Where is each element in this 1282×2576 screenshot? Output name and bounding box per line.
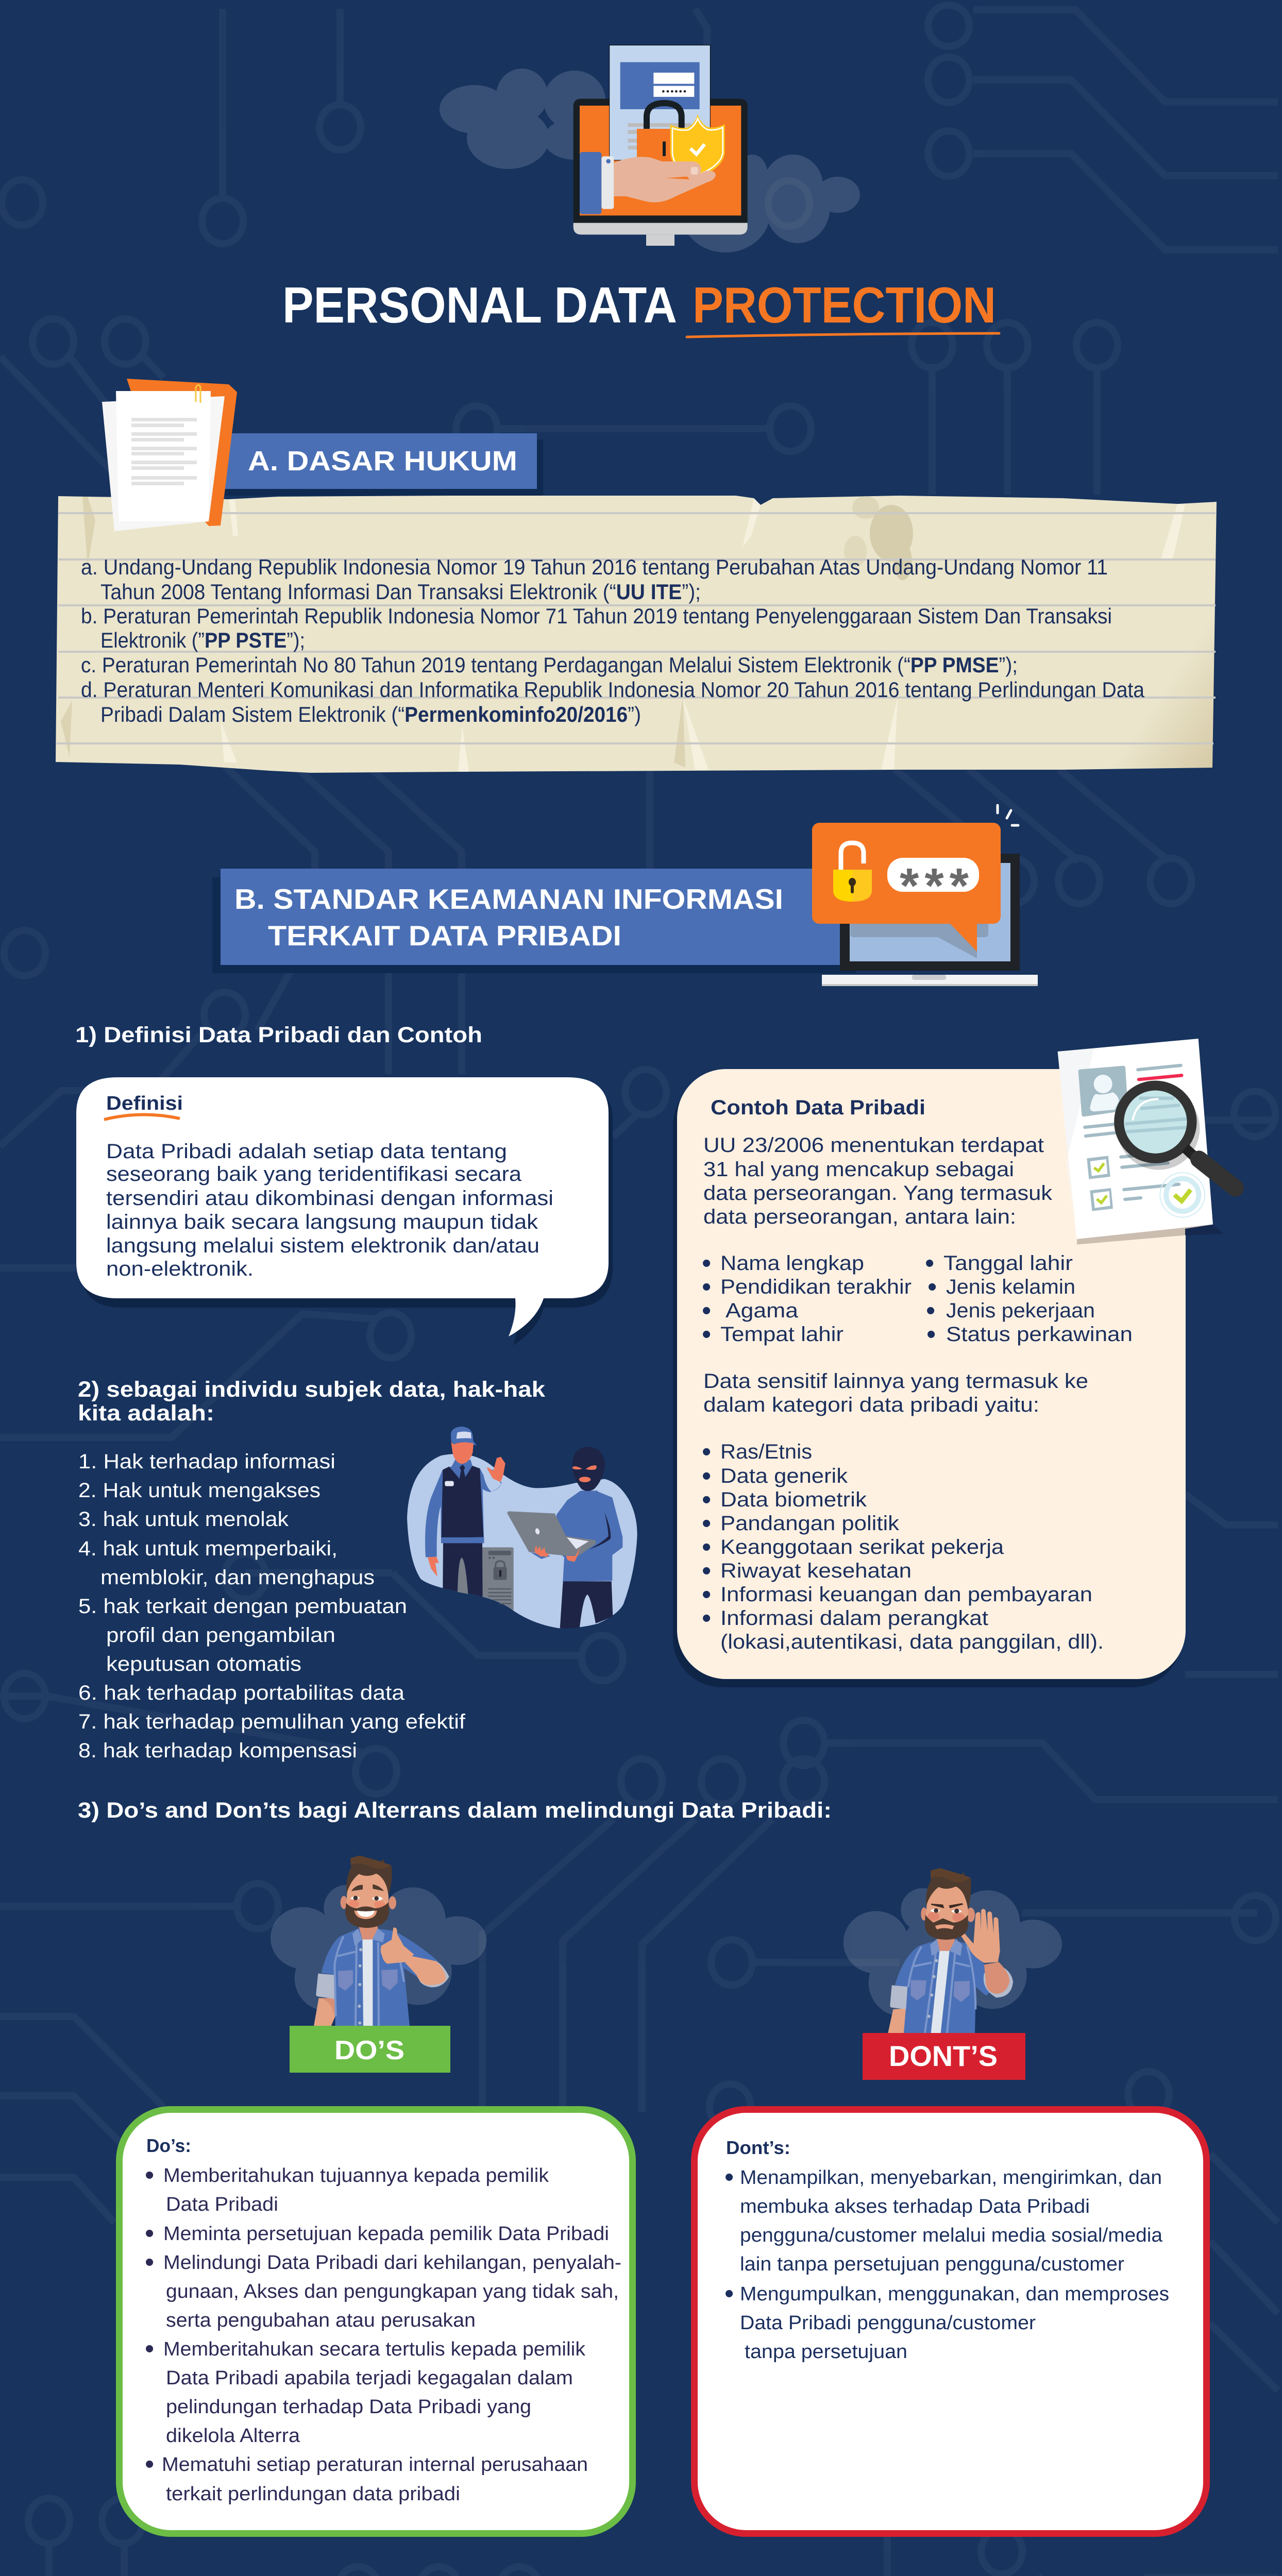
examples heading: Contoh Data Pribadi bbox=[711, 1096, 925, 1119]
icon: document with magnifier bbox=[1058, 1039, 1235, 1245]
list: hak-hak subjek data: 8. hak terhadap kompensasi bbox=[78, 1739, 357, 1762]
Don'ts items: Menampilkan, menyebarkan, mengirimkan, dan bbox=[740, 2167, 1162, 2189]
personal data list: • bbox=[702, 1319, 711, 1349]
intro text: data perseorangan, antara lain: bbox=[703, 1206, 1016, 1228]
illustration: security guard and hacker bbox=[407, 1427, 637, 1629]
illustration: man giving thumbs up bbox=[271, 1856, 486, 2026]
Do's items: Data Pribadi bbox=[166, 2194, 278, 2215]
label: DONT'S: DONT’S bbox=[889, 2040, 998, 2072]
legal basis list: Tahun 2008 Tentang Informasi Dan Transaksi Elektronik (“UU ITE”); bbox=[100, 580, 701, 604]
legal basis list: Elektronik (”PP PSTE”); bbox=[100, 628, 305, 652]
definition text: Data Pribadi adalah setiap data tentang bbox=[106, 1140, 507, 1163]
sensitive data intro: dalam kategori data pribadi yaitu: bbox=[703, 1394, 1039, 1416]
list: hak-hak subjek data: 5. hak terkait dengan pembuatan bbox=[78, 1595, 407, 1618]
Do's items: • bbox=[145, 2247, 154, 2277]
Do's items: • bbox=[145, 2218, 154, 2248]
Do's items: Memberitahukan secara tertulis kepada pemilik bbox=[163, 2338, 586, 2360]
personal data list: Tempat lahir bbox=[720, 1323, 844, 1346]
heading: 2) hak-hak subjek data: 2) sebagai individu subjek data, hak-hak bbox=[78, 1377, 545, 1402]
sensitive data list: Riwayat kesehatan bbox=[720, 1560, 912, 1582]
list: hak-hak subjek data: 1. Hak terhadap informasi bbox=[78, 1450, 335, 1473]
definition text: non-elektronik. bbox=[106, 1258, 254, 1280]
heading: 1) Definisi Data Pribadi dan Contoh: 1) Definisi Data Pribadi dan Contoh bbox=[75, 1023, 482, 1047]
sensitive data list: • bbox=[702, 1437, 711, 1467]
Do's items: serta pengubahan atau perusakan bbox=[166, 2310, 476, 2331]
personal data list: Jenis kelamin bbox=[946, 1276, 1075, 1298]
sensitive data list: Ras/Etnis bbox=[720, 1440, 812, 1463]
sensitive data list: Data generik bbox=[720, 1465, 848, 1487]
Don'ts items: pengguna/customer melalui media sosial/media bbox=[740, 2225, 1163, 2246]
label: DO'S: DO’S bbox=[334, 2036, 404, 2065]
Definisi label: Definisi bbox=[106, 1093, 183, 1114]
Do's items: Melindungi Data Pribadi dari kehilangan, penyalah- bbox=[163, 2252, 621, 2274]
personal data list: Jenis pekerjaan bbox=[946, 1299, 1095, 1322]
intro text: UU 23/2006 menentukan terdapat bbox=[703, 1134, 1044, 1157]
personal data list: Status perkawinan bbox=[946, 1323, 1133, 1346]
Do's items: • bbox=[145, 2334, 154, 2364]
panel: torn paper with legal basis bbox=[56, 496, 1217, 773]
legal basis list: b. Peraturan Pemerintah Republik Indonesia Nomor 71 Tahun 2019 tentang Penyelenggaraan Sistem Dan Transaksi bbox=[81, 604, 1112, 628]
sensitive data list: • bbox=[702, 1509, 711, 1538]
heading: B. Standar Keamanan Informasi: B. STANDAR KEAMANAN INFORMASI bbox=[234, 883, 783, 915]
Don'ts heading: Dont’s: bbox=[726, 2137, 790, 2158]
personal data list: Tanggal lahir bbox=[943, 1252, 1073, 1275]
list: hak-hak subjek data: keputusan otomatis bbox=[106, 1653, 301, 1675]
personal data list: • bbox=[702, 1296, 711, 1326]
panel: Do's list bbox=[120, 2109, 633, 2534]
personal data list: • bbox=[926, 1319, 936, 1349]
definition text: tersendiri atau dikombinasi dengan informasi bbox=[106, 1187, 553, 1210]
legal basis list: a. Undang-Undang Republik Indonesia Nomor 19 Tahun 2016 tentang Perubahan Atas Undang-Undang Nomor 11 bbox=[81, 555, 1108, 579]
illustration: man raising stop hand bbox=[844, 1868, 1062, 2033]
Do's items: terkait perlindungan data pribadi bbox=[166, 2483, 460, 2505]
icon: laptop with password bubble: *** bbox=[900, 858, 969, 913]
definition text: lainnya baik secara langsung maupun tidak bbox=[106, 1211, 538, 1233]
legal basis list bbox=[81, 555, 1145, 726]
list: hak-hak subjek data: profil dan pengambilan bbox=[106, 1624, 335, 1647]
heading: B. Standar Keamanan Informasi: TERKAIT DATA PRIBADI bbox=[268, 920, 621, 952]
personal data list: • bbox=[925, 1248, 934, 1278]
panel: Contoh Data Pribadi bbox=[673, 1069, 1186, 1687]
Don'ts items: • bbox=[724, 2279, 734, 2309]
Do's items: • bbox=[145, 2449, 154, 2479]
Do's items: pelindungan terhadap Data Pribadi yang bbox=[166, 2396, 531, 2418]
title: PERSONAL DATA bbox=[282, 277, 677, 333]
intro text bbox=[703, 1134, 1053, 1228]
list: hak-hak subjek data: 7. hak terhadap pemulihan yang efektif bbox=[78, 1710, 466, 1733]
personal data list: Pendidikan terakhir bbox=[720, 1276, 912, 1298]
intro text: 31 hal yang mencakup sebagai bbox=[703, 1158, 1014, 1181]
sensitive data list: (lokasi,autentikasi, data panggilan, dll). bbox=[720, 1631, 1104, 1653]
Do's heading: Do’s: bbox=[146, 2135, 191, 2156]
icon: monitor with login page, padlock, shield and hand bbox=[440, 45, 860, 252]
heading: 3) Do's and Don'ts: 3) Do’s and Don’ts bagi Alterrans dalam melindungi Data Pribadi: bbox=[78, 1798, 832, 1823]
personal data list: Nama lengkap bbox=[720, 1252, 864, 1275]
legal basis list: d. Peraturan Menteri Komunikasi dan Informatika Republik Indonesia Nomor 20 Tahun 2016 tentang Perlindungan Data bbox=[81, 677, 1145, 702]
title: PROTECTION bbox=[693, 277, 996, 333]
Do's items: dikelola Alterra bbox=[166, 2425, 300, 2447]
Do's items: Data Pribadi apabila terjadi kegagalan dalam bbox=[166, 2367, 573, 2389]
Do's items: Meminta persetujuan kepada pemilik Data Pribadi bbox=[163, 2223, 609, 2245]
sensitive data list: Data biometrik bbox=[720, 1488, 867, 1511]
sensitive data list: • bbox=[702, 1580, 711, 1609]
sensitive data list: Informasi dalam perangkat bbox=[720, 1607, 988, 1630]
Don'ts items: lain tanpa persetujuan pengguna/customer bbox=[740, 2253, 1124, 2275]
Do's items: Memberitahukan tujuannya kepada pemilik bbox=[163, 2165, 549, 2187]
heading: A. Dasar Hukum: A. DASAR HUKUM bbox=[248, 446, 517, 477]
sensitive data list: • bbox=[702, 1461, 711, 1491]
heading: 2) hak-hak subjek data: kita adalah: bbox=[78, 1401, 214, 1426]
sensitive data list: Pandangan politik bbox=[720, 1512, 900, 1535]
list: hak-hak subjek data: 3. hak untuk menolak bbox=[78, 1508, 289, 1531]
Don'ts items: • bbox=[724, 2162, 734, 2192]
sensitive data intro: Data sensitif lainnya yang termasuk ke bbox=[703, 1370, 1088, 1393]
definition text: seseorang baik yang teridentifikasi secara bbox=[106, 1163, 522, 1185]
sensitive data list: • bbox=[702, 1532, 711, 1562]
icon: laptop with password bubble bbox=[812, 805, 1038, 986]
heading: A. Dasar Hukum bbox=[222, 433, 543, 496]
list: hak-hak subjek data: 6. hak terhadap portabilitas data bbox=[78, 1682, 405, 1704]
personal data list: • bbox=[702, 1248, 711, 1278]
Don'ts items bbox=[724, 2162, 1169, 2363]
Do's items bbox=[145, 2160, 621, 2505]
list: hak-hak subjek data: 2. Hak untuk mengakses bbox=[78, 1479, 320, 1502]
Don'ts items: tanpa persetujuan bbox=[745, 2341, 907, 2363]
Do's items: gunaan, Akses dan pengungkapan yang tidak sah, bbox=[166, 2281, 619, 2302]
Don'ts items: Data Pribadi pengguna/customer bbox=[740, 2312, 1036, 2334]
list: hak-hak subjek data: 4. hak untuk memperbaiki, bbox=[78, 1537, 338, 1560]
personal data list: • bbox=[926, 1296, 935, 1326]
definition text bbox=[106, 1140, 553, 1280]
heading: B. Standar Keamanan Informasi bbox=[212, 869, 856, 973]
personal data list: • bbox=[702, 1272, 711, 1302]
panel: Definisi speech bubble bbox=[76, 1077, 613, 1345]
personal data list bbox=[702, 1248, 1133, 1349]
sensitive data list bbox=[702, 1437, 1104, 1653]
legal basis list: c. Peraturan Pemerintah No 80 Tahun 2019 tentang Perdagangan Melalui Sistem Elektronik (“PP PMSE”); bbox=[81, 653, 1018, 677]
panel: Don'ts list bbox=[695, 2109, 1207, 2534]
legal basis list: Pribadi Dalam Sistem Elektronik (“Permenkominfo20/2016”) bbox=[100, 702, 641, 726]
Don'ts items: membuka akses terhadap Data Pribadi bbox=[740, 2196, 1090, 2217]
definition text: langsung melalui sistem elektronik dan/atau bbox=[106, 1234, 539, 1257]
Do's items: Mematuhi setiap peraturan internal perusahaan bbox=[162, 2454, 588, 2476]
sensitive data list: • bbox=[702, 1485, 711, 1515]
sensitive data intro bbox=[703, 1370, 1088, 1416]
personal data list: • bbox=[927, 1272, 937, 1302]
sensitive data list: Informasi keuangan dan pembayaran bbox=[720, 1583, 1092, 1606]
sensitive data list: • bbox=[702, 1603, 711, 1633]
intro text: data perseorangan. Yang termasuk bbox=[703, 1182, 1053, 1205]
label: DO'S bbox=[290, 2026, 450, 2073]
title bbox=[282, 277, 999, 337]
sensitive data list: Keanggotaan serikat pekerja bbox=[720, 1536, 1004, 1558]
label: DONT'S bbox=[863, 2033, 1025, 2080]
Don'ts items: Mengumpulkan, menggunakan, dan memproses bbox=[740, 2283, 1169, 2305]
list: hak-hak subjek data: memblokir, dan menghapus bbox=[100, 1566, 375, 1589]
list: hak-hak subjek data bbox=[78, 1450, 466, 1762]
icon: documents with orange folder bbox=[102, 379, 237, 531]
personal data list: Agama bbox=[726, 1299, 799, 1322]
heading: 2) hak-hak subjek data bbox=[78, 1377, 545, 1426]
sensitive data list: • bbox=[702, 1556, 711, 1586]
Do's items: • bbox=[145, 2160, 154, 2190]
